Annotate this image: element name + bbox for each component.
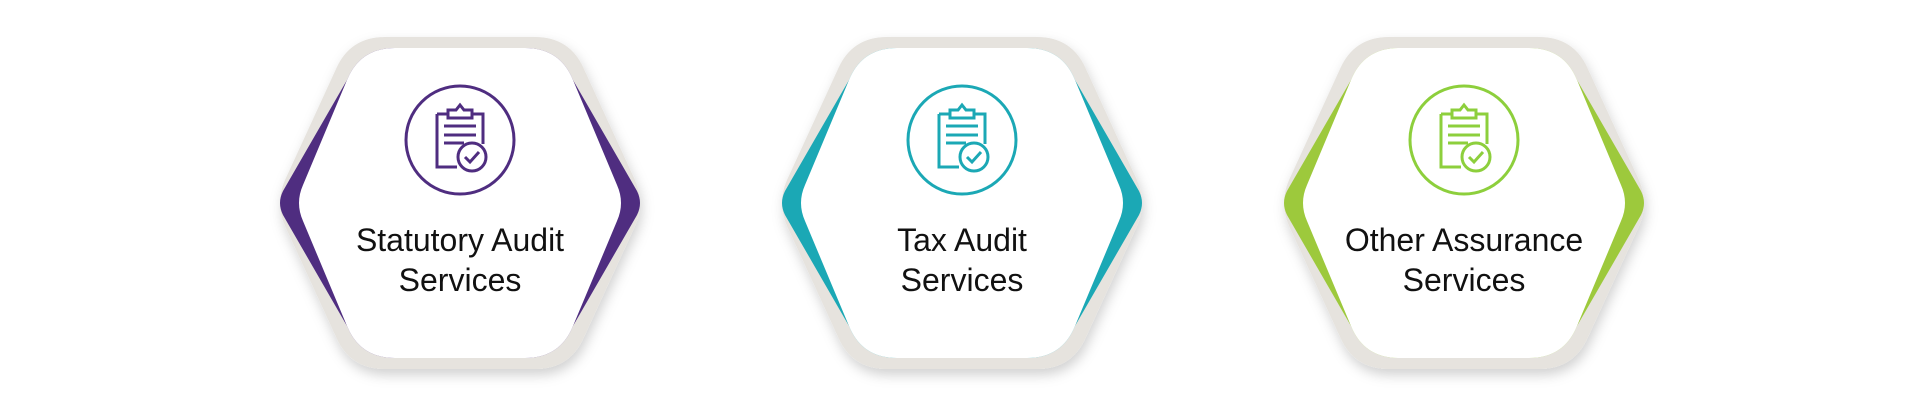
- label: [356, 222, 564, 298]
- panel: statutory audit services: [280, 37, 640, 369]
- label: Services: [901, 262, 1023, 298]
- label: Statutory Audit: [356, 222, 564, 258]
- accent band: purple: [280, 48, 640, 358]
- label: [1345, 222, 1583, 298]
- label: Services: [399, 262, 521, 298]
- label: Services: [1403, 262, 1525, 298]
- accent band: teal: [782, 48, 1142, 358]
- panel: tax audit services: [782, 37, 1142, 369]
- icon: clipboard with check: [908, 86, 1016, 194]
- icon: clipboard with check: [406, 86, 514, 194]
- label: [897, 222, 1027, 298]
- label: Other Assurance: [1345, 222, 1583, 258]
- label: Tax Audit: [897, 222, 1027, 258]
- panel: other assurance services: [1284, 37, 1644, 369]
- accent band: green: [1284, 48, 1644, 358]
- icon: clipboard with check: [1410, 86, 1518, 194]
